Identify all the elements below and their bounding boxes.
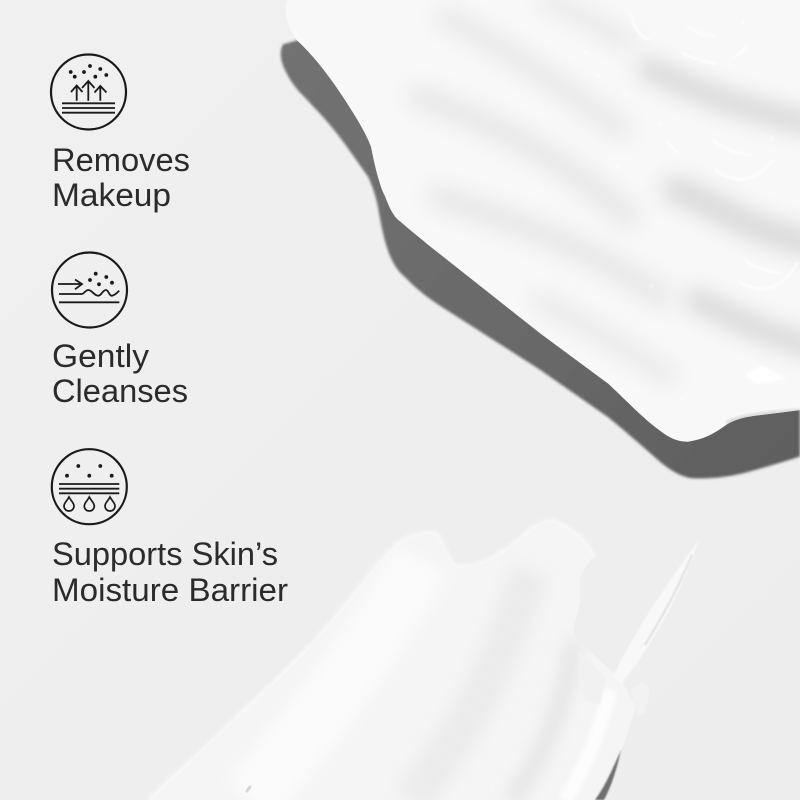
benefit: removes makeup <box>51 54 190 213</box>
benefit: gently cleanses <box>52 252 188 409</box>
icon: barrier with droplets <box>52 449 127 524</box>
label: gently cleanses: Cleanses <box>52 373 188 409</box>
torn cream edge <box>578 650 606 705</box>
deep ripple shadows <box>649 68 800 347</box>
icon: flow over wavy skin <box>52 252 127 328</box>
label: supports skin's moisture barrier: Moisture Barrier <box>52 572 288 608</box>
small cream bubble <box>247 787 250 791</box>
label: removes makeup: Makeup <box>52 177 171 213</box>
soft ripple shadows <box>419 0 669 377</box>
ripple gloss marks <box>651 286 652 287</box>
label: supports skin's moisture barrier: Supports Skin’s <box>52 536 278 572</box>
label: removes makeup: Removes <box>52 142 190 178</box>
cream body <box>286 0 800 442</box>
tail streak <box>595 540 699 800</box>
smear body <box>151 522 636 800</box>
label: gently cleanses: Gently <box>52 338 149 374</box>
icon: particles lifted from skin <box>51 54 126 130</box>
benefit: supports moisture barrier <box>52 449 288 608</box>
cream smear: lower centre <box>151 522 699 800</box>
cream shadow <box>281 30 800 478</box>
smear glow rim <box>151 522 593 800</box>
cream swatch and shadow: upper right <box>281 0 800 478</box>
